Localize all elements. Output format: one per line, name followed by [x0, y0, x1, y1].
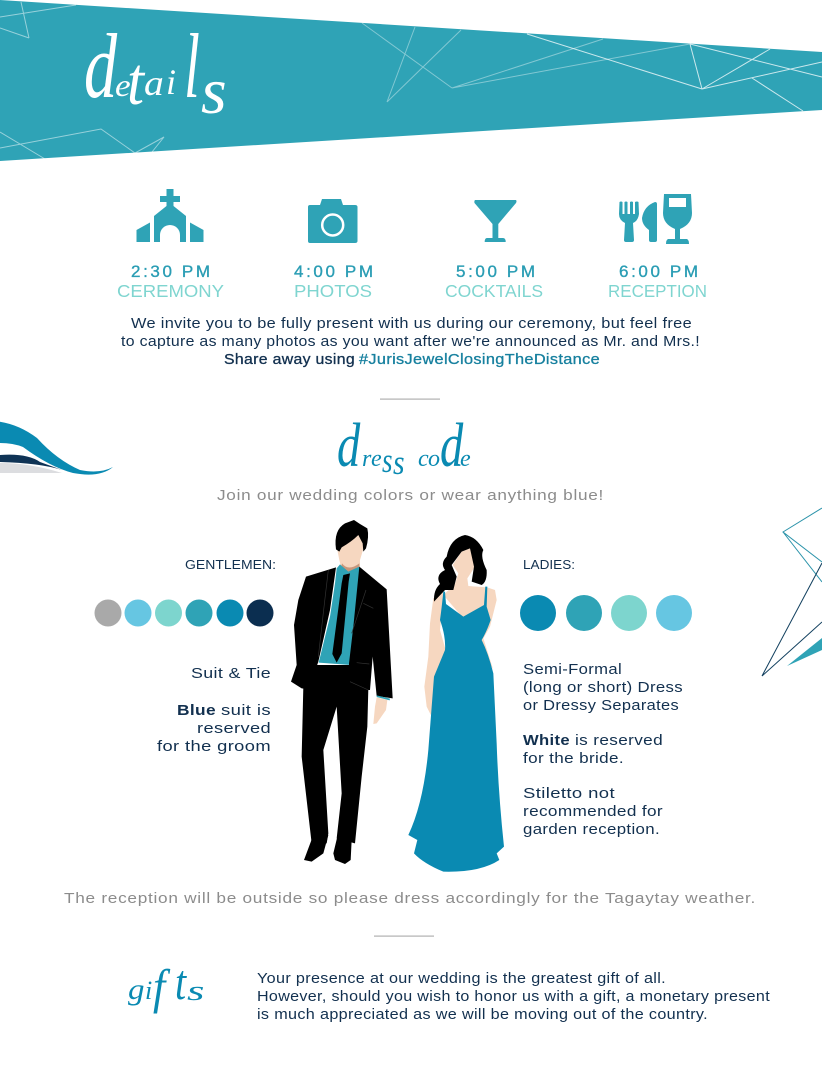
heading: dress code: e	[371, 446, 382, 472]
gentlemen notes: Suit & Tie	[191, 666, 271, 682]
title: details: t	[127, 43, 146, 119]
ladies notes: (long or short) Dress	[523, 680, 683, 696]
item: ceremony: CEREMONY	[117, 281, 224, 301]
title: details: e	[115, 68, 131, 104]
gentlemen notes: for the groom	[157, 739, 271, 755]
ladies notes: Stiletto not	[523, 786, 615, 802]
heading: gifts: i	[145, 976, 152, 1005]
illustration: woman in blue gown	[408, 535, 504, 872]
intro paragraph: We invite you to be fully present with us during our ceremony, but feel free	[131, 316, 692, 332]
title: details: s	[201, 55, 227, 128]
intro paragraph: #JurisJewelClosingTheDistance	[359, 352, 600, 368]
ladies notes: is reserved	[575, 733, 663, 749]
header banner	[0, 0, 822, 161]
item: cocktails: COCKTAILS	[445, 281, 543, 301]
heading: dress code: o	[428, 446, 440, 472]
item: ceremony: 2:30 PM	[131, 262, 210, 281]
intro paragraph: to capture as many photos as you want after we're announced as Mr. and Mrs.!	[121, 334, 700, 350]
title: details: l	[184, 15, 200, 117]
heading: gifts: t	[175, 955, 187, 1010]
item: photos: PHOTOS	[294, 281, 372, 301]
panel: ladies	[520, 558, 692, 838]
ladies notes	[523, 662, 683, 838]
gifts message: Your presence at our wedding is the greatest gift of all.	[257, 971, 666, 987]
heading: dress code: e	[460, 446, 471, 472]
dress code subtitle: Join our wedding colors or wear anything blue!	[217, 488, 604, 504]
heading: dress code: d	[337, 411, 361, 480]
heading: dress code: s	[393, 444, 405, 483]
heading: gifts	[128, 955, 204, 1015]
icon: cocktail glass	[474, 200, 516, 242]
heading: dress code: s	[382, 441, 393, 480]
heading: dress code: c	[418, 446, 429, 472]
gentlemen notes: suit is	[221, 703, 271, 719]
gentlemen notes: reserved	[197, 721, 271, 737]
ladies notes: White	[523, 733, 570, 749]
ladies notes: garden reception.	[523, 822, 660, 838]
icon: fork, knife and wine glass	[619, 194, 692, 244]
ladies notes: Semi-Formal	[523, 662, 622, 678]
item: photos: 4:00 PM	[294, 262, 373, 281]
icon: camera	[308, 199, 358, 243]
illustration: man in black suit	[291, 520, 393, 864]
ladies notes: for the bride.	[523, 751, 624, 767]
heading: gifts: f	[153, 961, 171, 1015]
gentlemen colour swatches	[94, 600, 274, 626]
gentlemen notes: Blue	[177, 703, 216, 719]
ladies colour swatches	[520, 595, 692, 631]
gifts message: However, should you wish to honor us with a gift, a monetary present	[257, 989, 770, 1005]
schedule row	[117, 189, 707, 301]
panel: gentlemen	[94, 558, 276, 755]
ladies notes: or Dressy Separates	[523, 698, 679, 714]
title: details: d	[84, 17, 118, 118]
gifts message	[257, 971, 770, 1023]
item: cocktails: 5:00 PM	[456, 262, 535, 281]
title: details	[84, 15, 227, 128]
item: reception: RECEPTION	[608, 281, 707, 301]
item: ceremony	[117, 189, 224, 301]
title: details: i	[166, 62, 176, 102]
decoration: right geometric lines	[762, 508, 822, 676]
heading: dress code: r	[362, 446, 372, 472]
heading: gifts: s	[187, 976, 204, 1007]
item: reception	[608, 194, 707, 301]
heading: dress code	[337, 411, 471, 483]
gentlemen label: GENTLEMEN:	[185, 558, 276, 572]
item: reception: 6:00 PM	[619, 262, 698, 281]
gifts message: is much appreciated as we will be moving out of the country.	[257, 1007, 708, 1023]
heading: dress code: d	[440, 411, 464, 480]
decoration: left swoosh	[0, 422, 113, 475]
heading: gifts: g	[128, 972, 144, 1006]
item: photos	[294, 199, 373, 301]
icon: church	[136, 189, 204, 242]
intro paragraph	[121, 316, 700, 368]
ladies label: LADIES:	[523, 558, 575, 572]
ladies notes: recommended for	[523, 804, 663, 820]
weather note: The reception will be outside so please dress accordingly for the Tagaytay weather.	[64, 891, 756, 907]
intro paragraph: Share away using	[224, 352, 355, 368]
title: details: a	[144, 64, 164, 104]
item: cocktails	[445, 200, 543, 301]
gentlemen notes	[157, 666, 271, 755]
